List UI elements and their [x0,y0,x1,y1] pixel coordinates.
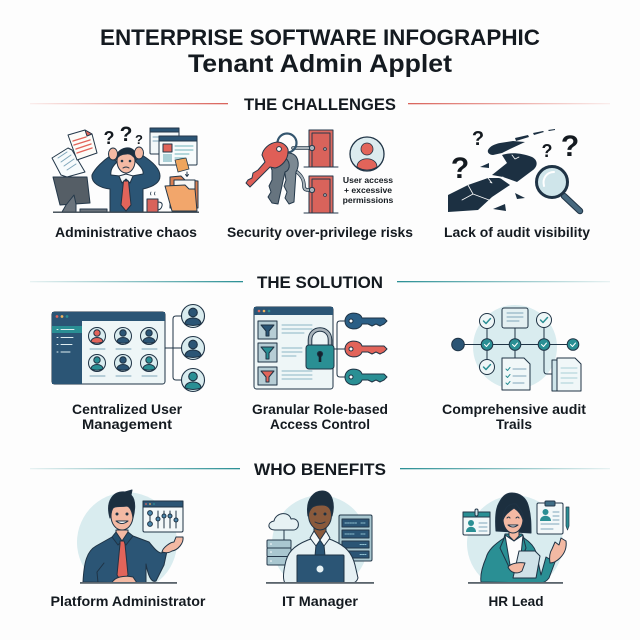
icon: question marks: ? [120,123,132,146]
heading: the solution: THE SOLUTION [257,274,383,292]
icon: key connectors [293,145,315,193]
label: Platform Administrator [50,593,206,609]
label [72,401,183,432]
panel: security over-privilege risks [227,130,413,240]
icon: cloud [269,514,298,541]
label [252,401,388,432]
icon: woman in teal suit [481,493,566,583]
label: Granular Role-based [252,401,388,417]
label: Security over-privilege risks [227,224,413,240]
icon: server rack [339,515,372,561]
panel: centralized user management [52,304,204,432]
icon: question marks [451,128,579,185]
title: Tenant Admin Applet [188,50,453,78]
icon: filters [258,321,277,385]
icon: server stack [267,540,291,565]
icon: browser windows [150,128,197,165]
background circle [473,305,557,389]
panel: comprehensive audit trails [442,305,586,432]
icon: keys [345,313,387,385]
note text: + excessive [344,185,392,195]
icon: sticky note and arrow [175,158,189,176]
icon: question marks: ? [135,132,143,147]
icon: question marks: ? [104,128,114,148]
icon: connector lines [165,316,182,380]
panel: it manager [266,491,374,609]
icon: magnifying glass [536,166,580,211]
icon: scattered documents [52,130,97,177]
icon: clipboard [537,501,563,534]
label: Centralized User [72,401,183,417]
label: Administrative chaos [55,224,197,240]
panel: administrative chaos [52,123,199,240]
note text: User access [343,175,393,185]
linked user avatars [182,304,204,392]
icon: user avatar [350,137,384,171]
decorative cracks [462,155,519,200]
background circle [467,495,563,583]
background circle [77,492,177,583]
note text: permissions [343,195,394,205]
icon: question marks: ? [451,152,469,185]
label: HR Lead [488,593,544,609]
heading: who benefits: WHO BENEFITS [254,461,386,479]
label: Trails [496,416,532,432]
icon: man with laptop [284,491,358,583]
icon: id badge [463,509,490,535]
panel: platform administrator [50,490,206,609]
panel: hr lead [463,493,569,609]
icon: connector lines [334,321,345,377]
label: Access Control [270,416,370,432]
icon: note document [502,308,528,328]
panel: lack of audit visibility [444,128,590,240]
label [442,401,586,432]
icon: padlock [306,330,334,369]
icon: key bunch [246,134,298,204]
label: Comprehensive audit [442,401,586,417]
icon: stacked document [552,358,581,391]
icon: man in suit [83,490,183,583]
title: ENTERPRISE SOFTWARE INFOGRAPHIC [100,25,540,50]
icon: folder [165,176,198,211]
icon: checklist document [502,358,530,390]
icon: question marks [104,123,143,148]
icon: stressed man [92,147,160,212]
icon: question marks: ? [472,128,484,150]
icon: pen [566,507,569,530]
label: IT Manager [282,593,359,609]
title [100,25,540,78]
icon: question marks: ? [542,141,552,161]
label: Management [82,416,172,432]
icon: broken trail [448,129,555,212]
icon: desktop monitor [53,177,107,212]
icon: timeline [452,312,579,374]
icon: sliders window [143,501,183,532]
icon: coffee mug [147,192,162,212]
heading: the challenges: THE CHALLENGES [244,96,396,114]
icon: doors [304,130,338,213]
icon: dashboard window [52,312,165,384]
icon: question marks: ? [561,130,579,163]
icon: permissions window [254,307,333,389]
panel: granular role-based access control [252,307,388,432]
note text [343,175,394,205]
label: Lack of audit visibility [444,224,590,240]
avatars grid [88,328,158,376]
background circle [272,495,368,583]
